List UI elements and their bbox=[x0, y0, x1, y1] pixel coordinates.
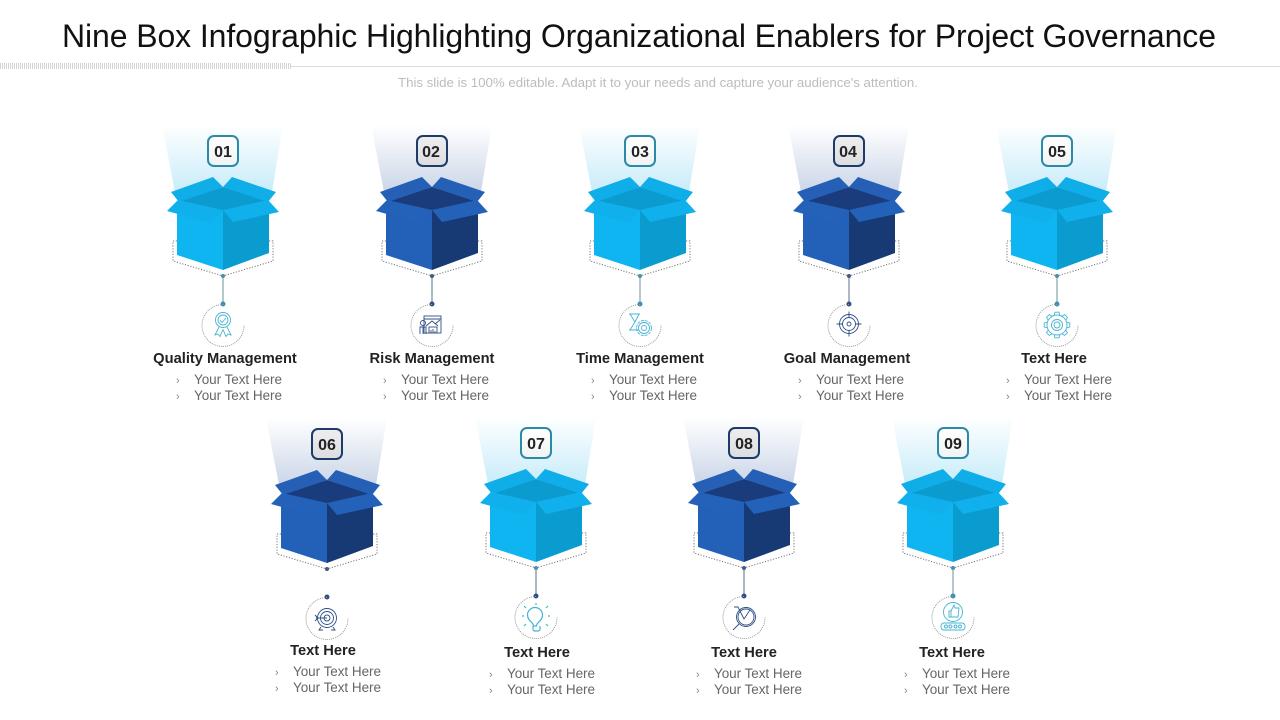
bullets 01: › bbox=[176, 375, 180, 387]
panel: box 09 text here bbox=[892, 417, 1013, 697]
beam 01 bbox=[162, 125, 283, 192]
panel: box 05 text here bbox=[996, 125, 1117, 403]
connector 09 bbox=[903, 533, 1003, 638]
connector 04 bbox=[799, 241, 899, 346]
title: Nine Box Infographic Highlighting Organizational Enablers for Project Governance bbox=[62, 18, 1216, 54]
icon: house chart bbox=[420, 316, 441, 334]
beam 06 bbox=[266, 418, 387, 485]
bullets 06: Your Text Here bbox=[293, 664, 381, 679]
connector 08 bbox=[694, 533, 794, 638]
bullets 06 bbox=[275, 664, 381, 695]
panel: box 03 time management bbox=[576, 125, 704, 403]
bullets 06: › bbox=[275, 683, 279, 695]
number badge 02 bbox=[417, 136, 447, 166]
beam 02 bbox=[371, 125, 492, 192]
icon: thumbs up rating bbox=[941, 602, 965, 630]
number badge 04: 04 bbox=[839, 144, 857, 161]
number badge 09: 09 bbox=[944, 436, 962, 453]
number badge 03 bbox=[625, 136, 655, 166]
bullets 04: › bbox=[798, 391, 802, 403]
bullets 07: Your Text Here bbox=[507, 682, 595, 697]
bullets 09: › bbox=[904, 669, 908, 681]
heading 03: Time Management bbox=[576, 351, 704, 367]
bullets 05 bbox=[1006, 372, 1112, 403]
bullets 01 bbox=[176, 372, 282, 403]
panel: box 06 text here bbox=[266, 418, 387, 695]
connector 01 bbox=[173, 241, 273, 346]
bullets 08 bbox=[696, 666, 802, 697]
bullets 01: Your Text Here bbox=[194, 372, 282, 387]
bullets 03: › bbox=[591, 391, 595, 403]
bullets 09: Your Text Here bbox=[922, 666, 1010, 681]
heading 05: Text Here bbox=[1021, 351, 1087, 367]
number badge 05: 05 bbox=[1048, 144, 1066, 161]
box 08 bbox=[688, 469, 800, 562]
box 06 bbox=[271, 470, 383, 563]
box 01 bbox=[167, 177, 279, 270]
bullets 08: › bbox=[696, 669, 700, 681]
bullets 04: Your Text Here bbox=[816, 372, 904, 387]
heading 01: Quality Management bbox=[153, 351, 297, 367]
icon: magnifier with chart bbox=[733, 607, 756, 630]
bullets 09 bbox=[904, 666, 1010, 697]
bullets 08: › bbox=[696, 685, 700, 697]
bullets 07 bbox=[489, 666, 595, 697]
number badge 07 bbox=[521, 428, 551, 458]
bullets 07: › bbox=[489, 685, 493, 697]
heading 09: Text Here bbox=[919, 645, 985, 661]
bullets 04 bbox=[798, 372, 904, 403]
icon: gear bbox=[1044, 312, 1070, 338]
icon: light bulb bbox=[522, 603, 550, 631]
box 07 bbox=[480, 469, 592, 562]
bullets 03: › bbox=[591, 375, 595, 387]
number badge 08 bbox=[729, 428, 759, 458]
bullets 03 bbox=[591, 372, 697, 403]
bullets 08: Your Text Here bbox=[714, 682, 802, 697]
connector 05 bbox=[1007, 241, 1107, 346]
bullets 03: Your Text Here bbox=[609, 388, 697, 403]
box 04 bbox=[793, 177, 905, 270]
panel: box 08 text here bbox=[683, 417, 804, 697]
number badge 04 bbox=[834, 136, 864, 166]
beam 03 bbox=[579, 125, 700, 192]
panel: box 07 text here bbox=[475, 417, 596, 697]
number badge 01: 01 bbox=[214, 144, 232, 161]
connector 02 bbox=[382, 241, 482, 346]
connector 07 bbox=[486, 533, 586, 638]
icon: award ribbon bbox=[215, 312, 231, 336]
box 03 bbox=[584, 177, 696, 270]
bullets 02: Your Text Here bbox=[401, 388, 489, 403]
bullets 07: Your Text Here bbox=[507, 666, 595, 681]
number badge 09 bbox=[938, 428, 968, 458]
connector 06 bbox=[277, 534, 377, 640]
beam 04 bbox=[788, 125, 909, 192]
bullets 01: › bbox=[176, 391, 180, 403]
beam 09 bbox=[892, 417, 1013, 484]
icon: crosshair target bbox=[836, 312, 862, 336]
bullets 02: Your Text Here bbox=[401, 372, 489, 387]
panel: box 02 risk management bbox=[370, 125, 495, 403]
number badge 07: 07 bbox=[527, 436, 545, 453]
box 09 bbox=[897, 469, 1009, 562]
icon: hourglass and gear bbox=[629, 314, 652, 336]
heading 07: Text Here bbox=[504, 645, 570, 661]
heading 08: Text Here bbox=[711, 645, 777, 661]
bullets 02: › bbox=[383, 375, 387, 387]
bullets 05: Your Text Here bbox=[1024, 372, 1112, 387]
number badge 02: 02 bbox=[422, 144, 440, 161]
beam 07 bbox=[475, 417, 596, 484]
number badge 03: 03 bbox=[631, 144, 649, 161]
number badge 05 bbox=[1042, 136, 1072, 166]
heading 02: Risk Management bbox=[370, 351, 495, 367]
box 02 bbox=[376, 177, 488, 270]
number badge 01 bbox=[208, 136, 238, 166]
icon: archery target bbox=[315, 608, 336, 630]
bullets 06: Your Text Here bbox=[293, 680, 381, 695]
number badge 06: 06 bbox=[318, 437, 336, 454]
bullets 09: Your Text Here bbox=[922, 682, 1010, 697]
box 05 bbox=[1001, 177, 1113, 270]
connector 03 bbox=[590, 241, 690, 346]
bullets 03: Your Text Here bbox=[609, 372, 697, 387]
bullets 05: › bbox=[1006, 391, 1010, 403]
bullets 04: › bbox=[798, 375, 802, 387]
bullets 09: › bbox=[904, 685, 908, 697]
panel: box 04 goal management bbox=[784, 125, 910, 403]
beam 05 bbox=[996, 125, 1117, 192]
heading 06: Text Here bbox=[290, 643, 356, 659]
beam 08 bbox=[683, 417, 804, 484]
header rule bbox=[0, 63, 1280, 69]
bullets 02 bbox=[383, 372, 489, 403]
bullets 04: Your Text Here bbox=[816, 388, 904, 403]
number badge 08: 08 bbox=[735, 436, 753, 453]
panel: box 01 quality management bbox=[153, 125, 297, 403]
subtitle: This slide is 100% editable. Adapt it to your needs and capture your audience's attention. bbox=[398, 75, 918, 90]
heading 04: Goal Management bbox=[784, 351, 910, 367]
number badge 06 bbox=[312, 429, 342, 459]
bullets 08: Your Text Here bbox=[714, 666, 802, 681]
bullets 05: Your Text Here bbox=[1024, 388, 1112, 403]
bullets 05: › bbox=[1006, 375, 1010, 387]
bullets 07: › bbox=[489, 669, 493, 681]
bullets 06: › bbox=[275, 667, 279, 679]
bullets 01: Your Text Here bbox=[194, 388, 282, 403]
bullets 02: › bbox=[383, 391, 387, 403]
